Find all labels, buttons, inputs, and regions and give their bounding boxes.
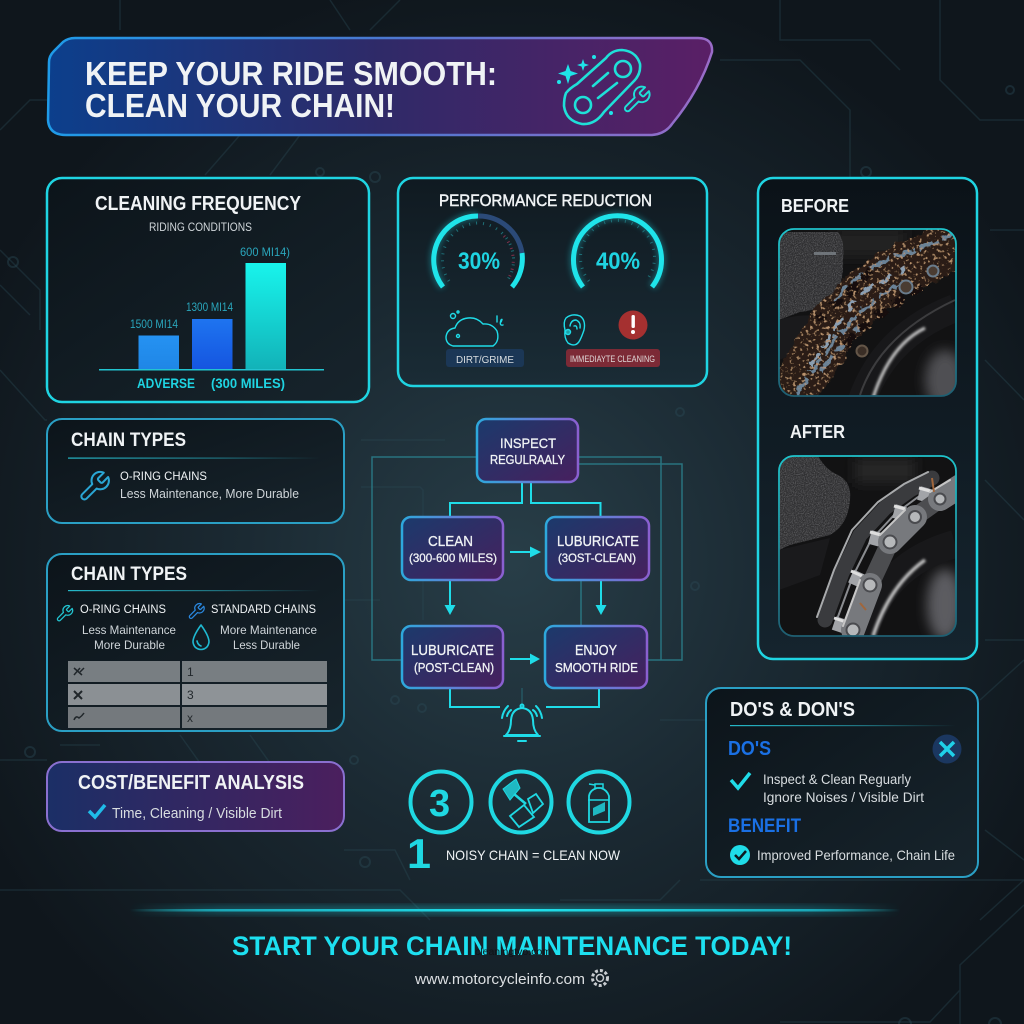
heading: before: BEFORE [781,196,849,216]
icon: spray can [568,772,630,832]
title banner [48,38,712,135]
call to action: START YOUR CHAIN MAINTENANCE TODAY! [232,931,792,961]
heading: cleaning frequency: CLEANING FREQUENCY [95,193,302,215]
icon: chain link with sparkles and wrench [557,50,650,124]
icon: ear [564,315,584,345]
heading: do's and don's: DO'S & DON'S [730,699,855,721]
step: enjoy smooth ride [545,626,647,688]
step: enjoy smooth ride: SMOOTH RIDE [555,661,638,675]
text: benefit: Improved Performance, Chain Life [757,847,955,863]
step: inspect regularly [477,419,578,482]
icon: number 3 badge: 3 [429,783,450,825]
text: do's list [763,771,924,805]
table: 1 [187,665,194,679]
text: maintenance note: Less Maintenance, More Durable [120,486,299,501]
text: do's list: Inspect & Clean Reguarly [763,771,911,787]
panel: do's and don'ts [706,688,978,877]
step: lubricate [546,517,649,580]
bar chart: 600 MI14) [240,245,290,259]
gauge: 30% [434,216,522,287]
step: lubricate: (3OST-CLEAN) [558,551,636,565]
table: x [187,711,193,725]
column: standard chains: Less Durable [233,638,300,652]
text: o-ring chains: O-RING CHAINS [120,469,207,483]
heading: chain types: CHAIN TYPES [71,430,186,451]
big number 1: 1 [407,830,431,877]
icon: standard wrench [189,604,204,618]
text: noisy chain note: NOISY CHAIN = CLEAN NOW [446,847,621,863]
text: benefit line: Time, Cleaning / Visible Dirt [112,806,282,822]
footer [130,905,900,988]
label: dirt/grime [446,349,524,367]
icon: oil drop [193,625,209,650]
heading: title line 2: CLEAN YOUR CHAIN! [85,87,395,124]
panel: cost/benefit analysis [47,762,344,831]
step: lubricate post-clean [402,626,503,688]
small overlaid text: cleaningtvo.com [475,947,551,958]
bar chart: 1300 MI14 [186,300,233,314]
column: o-ring chains: Less Maintenance [82,623,176,637]
icon: check [89,805,105,817]
heading: after: AFTER [790,422,845,442]
step: inspect regularly: REGULRAALY [490,453,566,467]
axis label: ADVERSE [137,375,195,391]
panel: before and after [758,178,977,659]
panel: chain types comparison [47,554,344,731]
subheading: do's: DO'S [728,738,771,760]
bar chart: 1500 MI14 [130,317,178,331]
icon: bell [502,704,542,741]
gauge: 30%: 30% [458,248,500,275]
column: standard chains: More Maintenance [220,623,317,637]
column: standard chains: STANDARD CHAINS [211,604,316,616]
heading: cost/benefit: COST/BENEFIT ANALYSIS [78,772,304,794]
icon: dirt cloud [446,311,503,346]
panel: cleaning frequency [47,178,369,402]
photo: clean chain [779,456,963,641]
step: clean [402,517,503,580]
panel: performance reduction [398,178,707,386]
icon: o-ring wrench [57,606,73,621]
subheading: benefit: BENEFIT [728,816,801,837]
step: clean: CLEAN [428,533,473,550]
icon: gear [592,970,608,986]
step: inspect regularly: INSPECT [500,435,556,451]
gauge: 40% [574,216,662,287]
heading: chain types: CHAIN TYPES [71,564,187,585]
icon: wrench [81,472,109,499]
icon: check [731,773,750,788]
icon: cross [932,734,962,764]
flowchart [372,419,682,741]
column: standard chains [211,604,317,652]
label: immediate cleaning: IMMEDIAYTE CLEANING [570,354,655,365]
column: o-ring chains [80,604,176,652]
bar chart [99,245,324,370]
panel: chain types summary [47,419,344,523]
step: clean: (300-600 MILES) [409,551,497,565]
table: 3 [187,688,194,702]
icon: check circle [730,845,750,865]
label: dirt/grime: DIRT/GRIME [456,354,514,366]
step: lubricate: LUBURICATE [557,534,639,550]
table [68,661,327,728]
icon: number 3 badge [410,772,472,832]
icon: alert [618,310,648,340]
photo: rusty chain [778,228,957,397]
step: enjoy smooth ride: ENJOY [575,643,617,659]
website url: www.motorcycleinfo.com [414,971,585,988]
icon: cleaning brush and rags [490,772,552,832]
step: lubricate post-clean: (POST-CLEAN) [414,661,494,675]
text: do's list: Ignore Noises / Visible Dirt [763,789,924,805]
subheading: riding conditions: RIDING CONDITIONS [149,222,252,234]
column: o-ring chains: More Durable [94,638,165,652]
step: lubricate post-clean: LUBURICATE [411,643,494,659]
label: immediate cleaning [566,349,660,367]
column: o-ring chains: O-RING CHAINS [80,604,166,616]
axis label: miles: (300 MILES) [211,375,285,391]
heading: performance reduction: PERFORMANCE REDUCTION [439,191,652,210]
gauge: 40%: 40% [596,248,640,275]
heading: title: KEEP YOUR RIDE SMOOTH: [85,55,497,92]
